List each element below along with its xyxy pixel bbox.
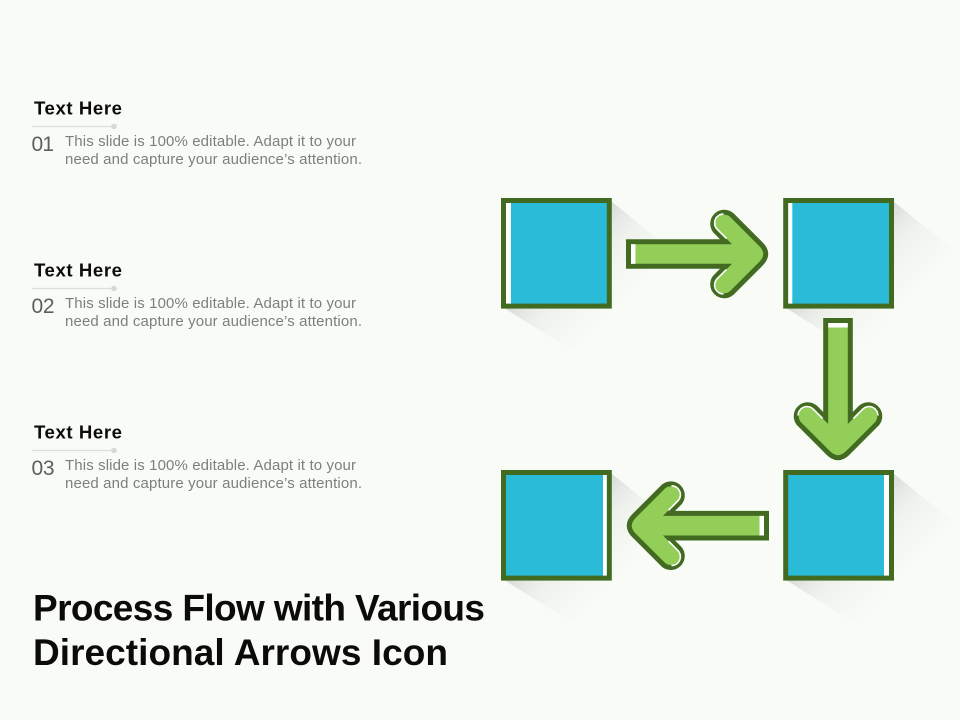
body text 2 <box>65 295 362 330</box>
arrow: down <box>796 320 880 458</box>
divider with dot 2 <box>32 286 117 291</box>
shadow: square 4 <box>786 473 960 622</box>
divider with dot 1 <box>32 124 117 129</box>
body text 1: This slide is 100% editable. Adapt it to your <box>65 133 356 150</box>
number 01: 01 <box>32 133 54 156</box>
title <box>33 588 485 673</box>
square 4 <box>786 472 892 578</box>
heading 1: Text Here <box>34 98 122 118</box>
section 2: text block <box>32 260 362 330</box>
section 3: text block <box>32 422 362 492</box>
body text 2: This slide is 100% editable. Adapt it to your <box>65 295 356 312</box>
divider with dot 3 <box>32 448 117 453</box>
body text 3 <box>65 457 362 492</box>
shadow: square 1 <box>504 201 681 350</box>
body text 2: need and capture your audience’s attention. <box>65 313 362 330</box>
square 3 <box>504 472 609 578</box>
arrow: right <box>628 212 766 296</box>
heading 3: Text Here <box>34 422 122 442</box>
number 02: 02 <box>32 295 54 318</box>
body text 1 <box>65 133 362 168</box>
body text 1: need and capture your audience’s attention. <box>65 151 362 168</box>
shadow: square 3 <box>504 473 681 622</box>
title: Process Flow with Various <box>33 588 485 628</box>
heading 2: Text Here <box>34 260 122 280</box>
square 2 <box>786 200 892 306</box>
square 1 <box>504 200 609 306</box>
arrow: left <box>629 484 766 567</box>
number 03: 03 <box>32 457 54 480</box>
body text 3: need and capture your audience’s attention. <box>65 475 362 492</box>
section 1: text block <box>32 98 362 168</box>
shadow: square 2 <box>786 201 960 350</box>
title: Directional Arrows Icon <box>33 632 448 673</box>
body text 3: This slide is 100% editable. Adapt it to your <box>65 457 356 474</box>
